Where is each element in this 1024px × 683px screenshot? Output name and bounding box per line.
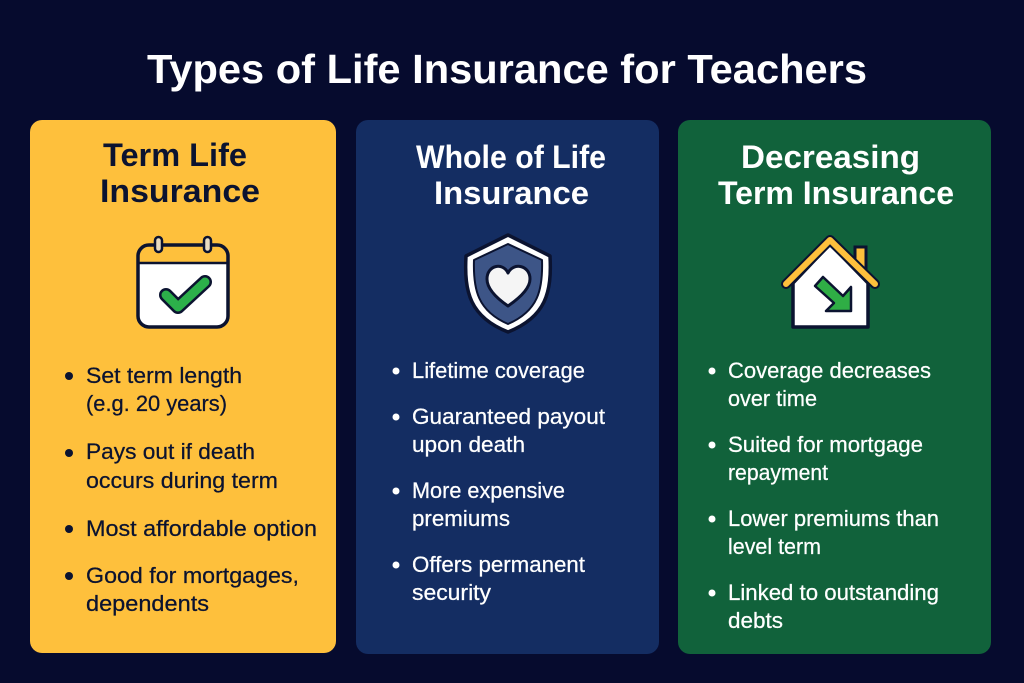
bullet list: term life: (e.g. 20 years): [86, 391, 227, 416]
bullet list: term life: Most affordable option: [86, 516, 317, 541]
title: Types of Life Insurance for Teachers: [147, 46, 867, 92]
icon: calendar with check mark: [138, 237, 228, 327]
bullet list: whole of life: security: [412, 580, 491, 605]
bullet list: term life: Set term length: [86, 363, 242, 388]
bullet list: decreasing term: Coverage decreases: [728, 358, 931, 383]
heading: whole of life insurance: Insurance: [434, 175, 589, 211]
bullet list: whole of life: Guaranteed payout: [412, 404, 605, 429]
bullet list: whole of life: [392, 358, 605, 605]
panel: decreasing term insurance: [678, 120, 991, 654]
bullet list: term life: occurs during term: [86, 468, 278, 493]
heading: term life insurance: Term Life: [103, 137, 247, 173]
panel: term life insurance: [30, 120, 336, 653]
bullet list: decreasing term: debts: [728, 608, 783, 633]
panel: whole of life insurance: [356, 120, 659, 654]
bullet list: whole of life: premiums: [412, 506, 510, 531]
heading: decreasing term insurance: Term Insurance: [718, 175, 954, 211]
bullet list: term life: [65, 363, 317, 616]
heading: decreasing term insurance: Decreasing: [741, 139, 920, 175]
bullet list: whole of life: upon death: [412, 432, 525, 457]
heading: term life insurance: [100, 137, 260, 209]
bullet list: whole of life: Lifetime coverage: [412, 358, 585, 383]
icon: shield with heart: [466, 235, 550, 332]
bullet list: decreasing term: Lower premiums than: [728, 506, 939, 531]
heading: whole of life insurance: Whole of Life: [416, 139, 606, 175]
bullet list: term life: dependents: [86, 591, 209, 616]
bullet list: decreasing term: level term: [728, 534, 821, 559]
bullet list: decreasing term: repayment: [728, 460, 828, 485]
bullet list: decreasing term: [708, 358, 939, 633]
bullet list: term life: Good for mortgages,: [86, 563, 299, 588]
bullet list: term life: Pays out if death: [86, 439, 255, 464]
heading: whole of life insurance: [416, 139, 606, 211]
icon: house with down arrow: [786, 240, 875, 327]
heading: term life insurance: Insurance: [100, 173, 260, 209]
bullet list: decreasing term: over time: [728, 386, 817, 411]
bullet list: decreasing term: Linked to outstanding: [728, 580, 939, 605]
bullet list: whole of life: Offers permanent: [412, 552, 585, 577]
bullet list: whole of life: More expensive: [412, 478, 565, 503]
heading: decreasing term insurance: [718, 139, 954, 211]
bullet list: decreasing term: Suited for mortgage: [728, 432, 923, 457]
